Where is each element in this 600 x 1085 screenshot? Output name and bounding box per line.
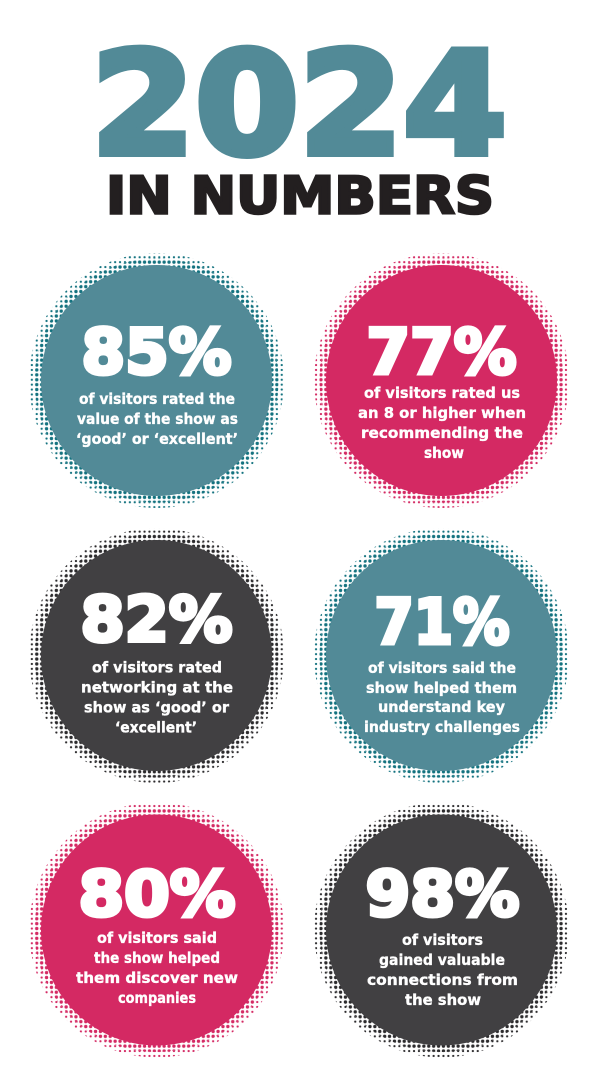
panel: 71% stat: [314, 528, 569, 783]
stat description: discover companies: of visitors said: [97, 929, 217, 947]
stat description: recommendation: [358, 384, 526, 462]
stat description: networking: ‘excellent’: [115, 718, 197, 736]
stat description: valuable connections: connections from: [367, 971, 518, 989]
stat description: valuable connections: gained valuable: [379, 951, 505, 969]
stat description: industry challenges: of visitors said the: [368, 659, 516, 677]
stat number: 80%: 80%: [78, 858, 236, 930]
panel: 98% stat: [314, 802, 569, 1058]
stat description: value of the show: of visitors rated the: [79, 390, 235, 408]
stat description: value of the show: ‘good’ or ‘excellent’: [76, 430, 238, 448]
panel: 82% stat: [29, 528, 284, 783]
panel: 77% stat: [314, 253, 569, 508]
stat description: discover companies: them discover new: [76, 969, 238, 987]
stat description: industry challenges: show helped them: [366, 679, 517, 697]
stat description: recommendation: show: [424, 444, 464, 462]
stat description: value of the show: value of the show as: [77, 410, 238, 428]
stat description: networking: of visitors rated: [92, 658, 222, 676]
stat description: networking: show as ‘good’ or: [84, 698, 230, 716]
stat number: 71%: 71%: [374, 586, 510, 658]
panel: 85% stat: [29, 253, 284, 508]
stat description: discover companies: the show helped: [94, 949, 220, 967]
subtitle: in numbers: IN NUMBERS: [106, 166, 494, 226]
stat description: value of the show: [76, 390, 238, 448]
stat description: industry challenges: industry challenges: [364, 718, 520, 736]
stat description: industry challenges: understand key: [378, 698, 505, 716]
stat number: 98%: 98%: [366, 858, 520, 930]
stat description: networking: networking at the: [81, 678, 233, 696]
stat number: 77%: 77%: [366, 316, 516, 388]
stat description: recommendation: an 8 or higher when: [358, 404, 526, 422]
stat number: 82%: 82%: [80, 583, 232, 656]
title: 2024: 2024: [91, 22, 507, 188]
stat number: 85%: 85%: [82, 316, 232, 388]
stat description: valuable connections: [367, 931, 518, 1009]
stat description: recommendation: recommending the: [361, 424, 523, 442]
stat description: recommendation: of visitors rated us: [364, 384, 520, 402]
stat description: valuable connections: of visitors: [402, 931, 483, 949]
stat description: industry challenges: [364, 659, 520, 736]
stat description: discover companies: companies: [118, 989, 196, 1007]
stat description: networking: [81, 658, 233, 736]
stat description: discover companies: [76, 929, 238, 1007]
panel: 80% stat: [29, 802, 284, 1058]
stat description: valuable connections: the show: [405, 991, 481, 1009]
